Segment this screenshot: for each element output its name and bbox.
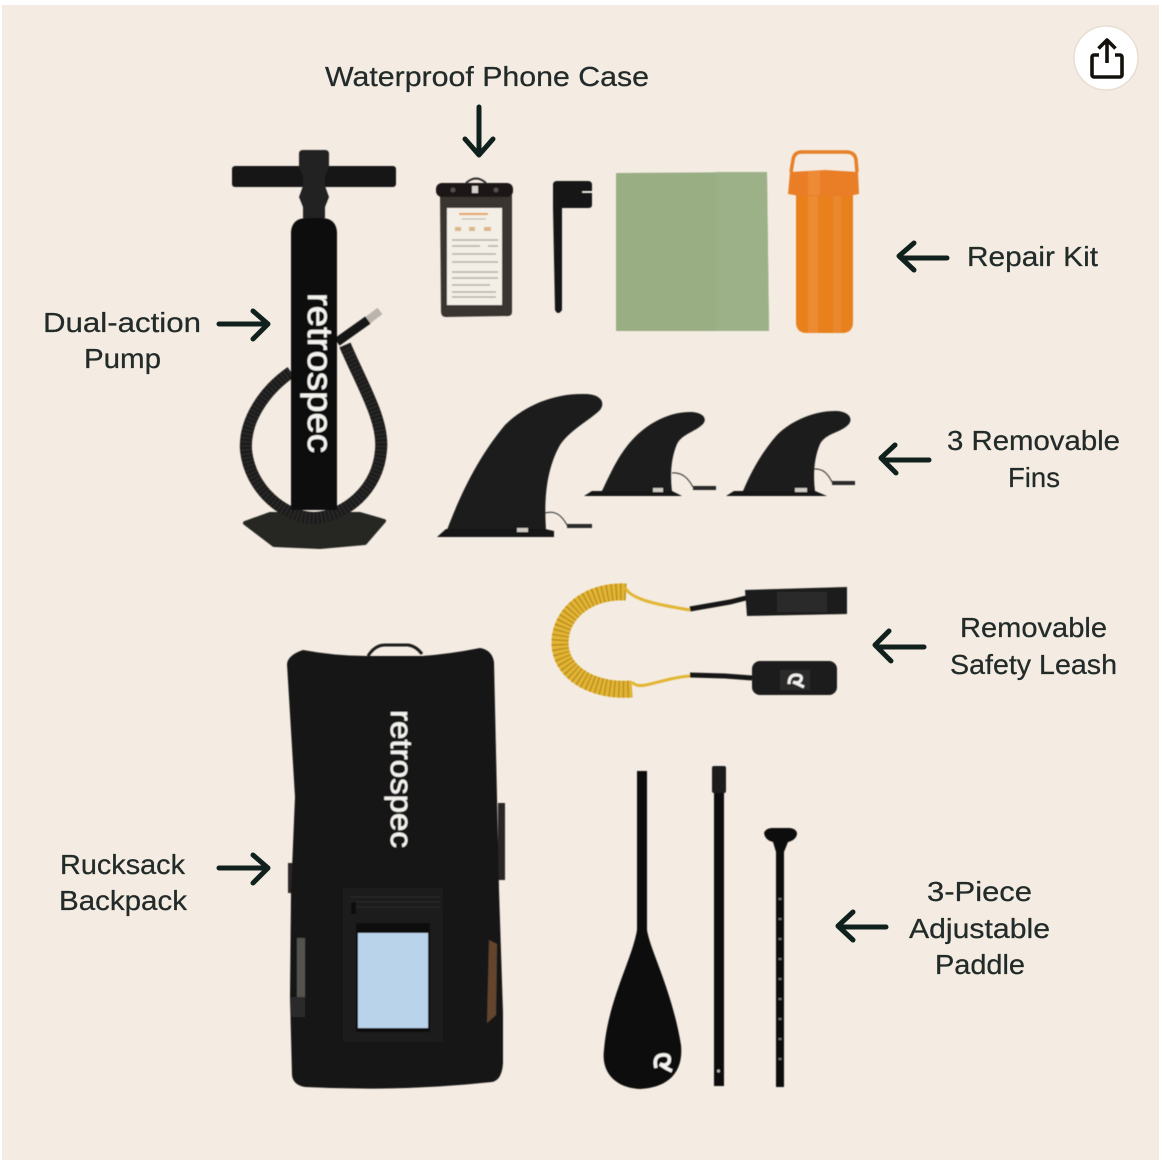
- paddle blade section: [604, 771, 681, 1089]
- arrow: to leash: [875, 631, 924, 661]
- label: removable safety leash: Safety Leash: [950, 649, 1117, 680]
- label: dual-action pump: Dual-action: [43, 307, 201, 338]
- label: 3-piece adjustable paddle: Paddle: [935, 949, 1025, 980]
- hose connector: [337, 320, 368, 342]
- bottle handle: [791, 152, 857, 172]
- label: rucksack backpack: [59, 849, 188, 916]
- label: 3 removable fins: 3 Removable: [947, 425, 1120, 456]
- blue card: [358, 933, 428, 1028]
- bag brand text: retrospec: [384, 710, 419, 848]
- label: rucksack backpack: Backpack: [59, 885, 188, 916]
- phone case: [436, 178, 513, 317]
- medium fin: [584, 412, 716, 496]
- label: 3-piece adjustable paddle: [909, 876, 1050, 980]
- zipper pull: [351, 902, 356, 914]
- front pocket: [343, 888, 443, 1042]
- small fin: [726, 411, 855, 496]
- phone pouch: [440, 195, 512, 317]
- label: waterproof phone case: Waterproof Phone Case: [325, 61, 649, 92]
- green repair patch: [616, 172, 769, 331]
- left buckle: [291, 997, 305, 1017]
- pump neck: [299, 150, 329, 218]
- right mesh pocket: [487, 940, 497, 1023]
- paddle middle shaft: [712, 766, 726, 1086]
- label: 3 removable fins: Fins: [1008, 462, 1060, 493]
- label: dual-action pump: Pump: [84, 343, 161, 374]
- cord connectors: [690, 598, 752, 678]
- fins: [437, 394, 855, 537]
- lower strap: [752, 661, 837, 695]
- label: rucksack backpack: Rucksack: [60, 849, 186, 880]
- label: 3 removable fins: [947, 425, 1120, 493]
- valve wrench: [553, 181, 592, 313]
- bottle body: [796, 195, 853, 333]
- arrow: to backpack: [219, 855, 268, 883]
- arrow: to phone case: [465, 107, 493, 155]
- coiled cord: [560, 592, 632, 689]
- label: repair kit: Repair Kit: [967, 241, 1098, 272]
- strap logo: [789, 675, 804, 687]
- phone closure band: [436, 183, 513, 197]
- label: removable safety leash: [950, 612, 1117, 680]
- pocket window: [356, 923, 430, 1032]
- three-piece paddle: [604, 766, 797, 1089]
- safety leash: [560, 587, 847, 695]
- pump brand text: retrospec: [300, 293, 339, 453]
- pump hose: [246, 345, 381, 518]
- share button: [1074, 26, 1138, 90]
- orange repair kit bottle: [788, 152, 859, 333]
- label: removable safety leash: Removable: [960, 612, 1107, 643]
- arrow: to pump: [219, 311, 268, 339]
- arrow: to paddle: [838, 912, 886, 940]
- pump body: [291, 218, 337, 510]
- bag body: [287, 648, 503, 1089]
- label: 3-piece adjustable paddle: 3-Piece: [927, 876, 1032, 907]
- pump handle: [232, 166, 396, 187]
- upper strap: [745, 587, 847, 616]
- large fin: [437, 394, 602, 537]
- bag handle: [368, 645, 422, 656]
- label: dual-action pump: [43, 307, 201, 374]
- pump base: [245, 514, 384, 547]
- arrow: to repair kit: [899, 243, 947, 270]
- label: 3-piece adjustable paddle: Adjustable: [909, 913, 1050, 944]
- side straps: [288, 803, 505, 893]
- arrow: to fins: [881, 445, 929, 473]
- instruction sheet: [447, 208, 502, 305]
- left mesh pocket: [297, 938, 305, 998]
- bottle lid: [788, 170, 859, 196]
- straight cord sections: [625, 587, 690, 686]
- dual-action pump: [232, 150, 396, 547]
- rucksack backpack: [287, 645, 505, 1089]
- paddle handle section: [764, 828, 797, 1087]
